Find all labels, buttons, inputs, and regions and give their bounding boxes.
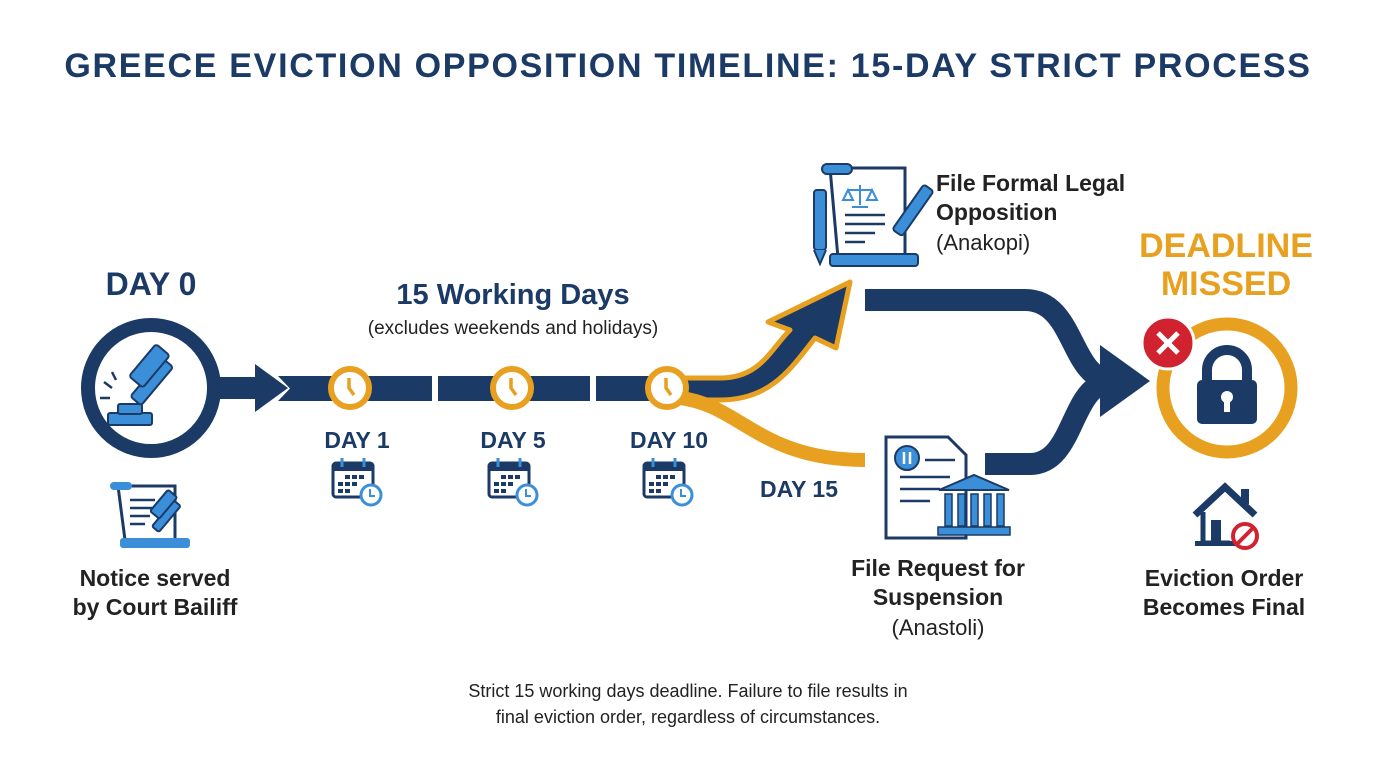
day labels: DAY 10	[630, 427, 708, 453]
heading: day 0: DAY 0	[106, 266, 196, 302]
day labels: DAY 15	[760, 476, 838, 502]
upper branch arrow	[670, 282, 850, 400]
day labels	[324, 427, 838, 502]
text: file request for suspension: Suspension	[873, 584, 1003, 610]
lower branch orange	[680, 398, 865, 460]
icon: notice document	[110, 482, 190, 548]
text: MISSED	[1161, 265, 1291, 303]
text: by Court Bailiff	[73, 594, 238, 620]
subtitle: (excludes weekends and holidays)	[368, 318, 658, 339]
text: file formal legal opposition: Opposition	[936, 199, 1057, 225]
text: file formal legal opposition: File Formal Legal	[936, 170, 1125, 196]
icon: lock circle	[1142, 317, 1291, 452]
icon: suspension document	[886, 437, 1010, 538]
text: file request for suspension: File Request for	[851, 555, 1025, 581]
text: Becomes Final	[1143, 594, 1305, 620]
icon: legal opposition document	[814, 164, 934, 266]
text: notice served: Notice served	[80, 565, 230, 591]
footnote: Strict 15 working days deadline. Failure to file results in	[468, 681, 908, 701]
icon: gavel circle	[88, 325, 214, 451]
clocks	[331, 369, 686, 407]
merge arrows	[865, 300, 1150, 464]
text: file formal legal opposition: (Anakopi)	[936, 230, 1030, 255]
arrow: start	[212, 364, 288, 412]
title: GREECE EVICTION OPPOSITION TIMELINE: 15-DAY STRICT PROCESS	[64, 47, 1312, 85]
icon: house with prohibited sign	[1195, 487, 1257, 548]
text: file request for suspension	[851, 555, 1025, 640]
heading: deadline missed: DEADLINE	[1139, 227, 1313, 265]
heading: 15 working days: 15 Working Days	[396, 279, 630, 311]
text: file formal legal opposition	[936, 170, 1125, 255]
text: eviction order final: Eviction Order	[1145, 565, 1303, 591]
timeline bar	[278, 376, 706, 401]
icons: calendars	[333, 458, 692, 505]
text: file request for suspension: (Anastoli)	[892, 615, 984, 640]
day labels: DAY 5	[480, 427, 546, 453]
text: final eviction order, regardless of circumstances.	[496, 707, 880, 727]
day labels: DAY 1	[324, 427, 390, 453]
